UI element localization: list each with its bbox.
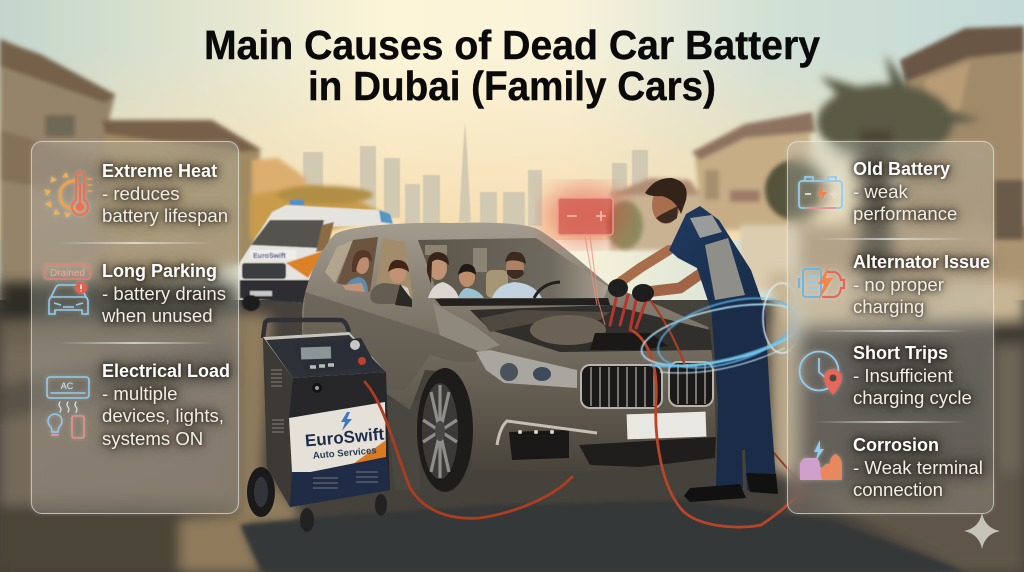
text: corrosion: Corrosion bbox=[853, 435, 939, 455]
text: corrosion bbox=[848, 431, 988, 506]
text: extreme heat: Extreme Heat bbox=[102, 161, 217, 181]
panel: causes right bbox=[787, 141, 994, 514]
icon: old battery bbox=[796, 174, 843, 211]
text: electrical load: Electrical Load bbox=[102, 361, 230, 381]
icon: sun and thermometer bbox=[44, 170, 93, 218]
text: long parking: Long Parking bbox=[102, 261, 217, 281]
blue energy swirl bbox=[636, 283, 808, 381]
text: alternator issue: Alternator Issue bbox=[853, 252, 990, 272]
text: alternator issue: - no proper bbox=[853, 274, 944, 295]
text: old battery: Old Battery bbox=[853, 159, 950, 179]
service machine: Auto Services bbox=[312, 445, 377, 462]
divider bbox=[57, 242, 213, 244]
text: alternator issue bbox=[847, 246, 996, 324]
icon: drained car: Drained bbox=[50, 268, 85, 279]
service machine bbox=[247, 320, 390, 532]
family car bbox=[302, 223, 716, 492]
jumper cables bbox=[365, 290, 806, 527]
warning battery hologram bbox=[543, 185, 627, 325]
text: short trips: Short Trips bbox=[853, 343, 948, 363]
text: old battery: - weak bbox=[853, 181, 908, 202]
open hood and engine bay bbox=[470, 305, 712, 352]
text: extreme heat bbox=[95, 155, 234, 233]
side windows bbox=[325, 237, 413, 298]
icon: AC, lightbulb and phone: AC bbox=[61, 381, 74, 391]
icon: corroded battery terminals bbox=[798, 440, 844, 482]
text: short trips: - Insufficient bbox=[853, 365, 953, 386]
watermark sparkle bbox=[964, 513, 1000, 549]
icon: drained car bbox=[43, 263, 92, 316]
kidney grille bbox=[581, 362, 713, 408]
text: long parking: when unused bbox=[102, 305, 213, 326]
text: old battery: performance bbox=[853, 203, 957, 224]
service machine: EuroSwift bbox=[304, 425, 385, 450]
text: electrical load: devices, lights, bbox=[102, 405, 224, 426]
icon: AC, lightbulb and phone bbox=[44, 374, 92, 440]
text: extreme heat: battery lifespan bbox=[102, 205, 228, 226]
text: short trips: charging cycle bbox=[853, 387, 972, 408]
service van bbox=[240, 200, 395, 311]
title: Main Causes of Dead Car Battery bbox=[204, 22, 820, 68]
icon: clock and pin bbox=[798, 349, 844, 396]
windshield with family bbox=[418, 238, 608, 300]
text: long parking bbox=[95, 255, 231, 330]
text: old battery bbox=[845, 153, 962, 230]
text: long parking: - battery drains bbox=[102, 283, 226, 304]
technician bbox=[608, 178, 778, 502]
text: short trips bbox=[848, 338, 976, 414]
lower bumper bbox=[497, 412, 716, 467]
text: corrosion: - Weak terminal bbox=[853, 457, 983, 478]
divider bbox=[813, 238, 968, 240]
text: electrical load bbox=[95, 355, 236, 455]
text: extreme heat: - reduces bbox=[102, 183, 180, 204]
text: electrical load: systems ON bbox=[102, 428, 203, 449]
title bbox=[204, 22, 820, 109]
text: alternator issue: charging bbox=[853, 296, 924, 317]
title: in Dubai (Family Cars) bbox=[308, 63, 716, 109]
text: electrical load: - multiple bbox=[102, 383, 177, 404]
headlight bbox=[476, 350, 577, 388]
icon: alternator bbox=[797, 265, 846, 300]
service van: EuroSwift bbox=[253, 253, 286, 260]
panel: causes left bbox=[31, 141, 239, 514]
text: corrosion: connection bbox=[853, 479, 943, 500]
front wheel bbox=[417, 368, 473, 492]
